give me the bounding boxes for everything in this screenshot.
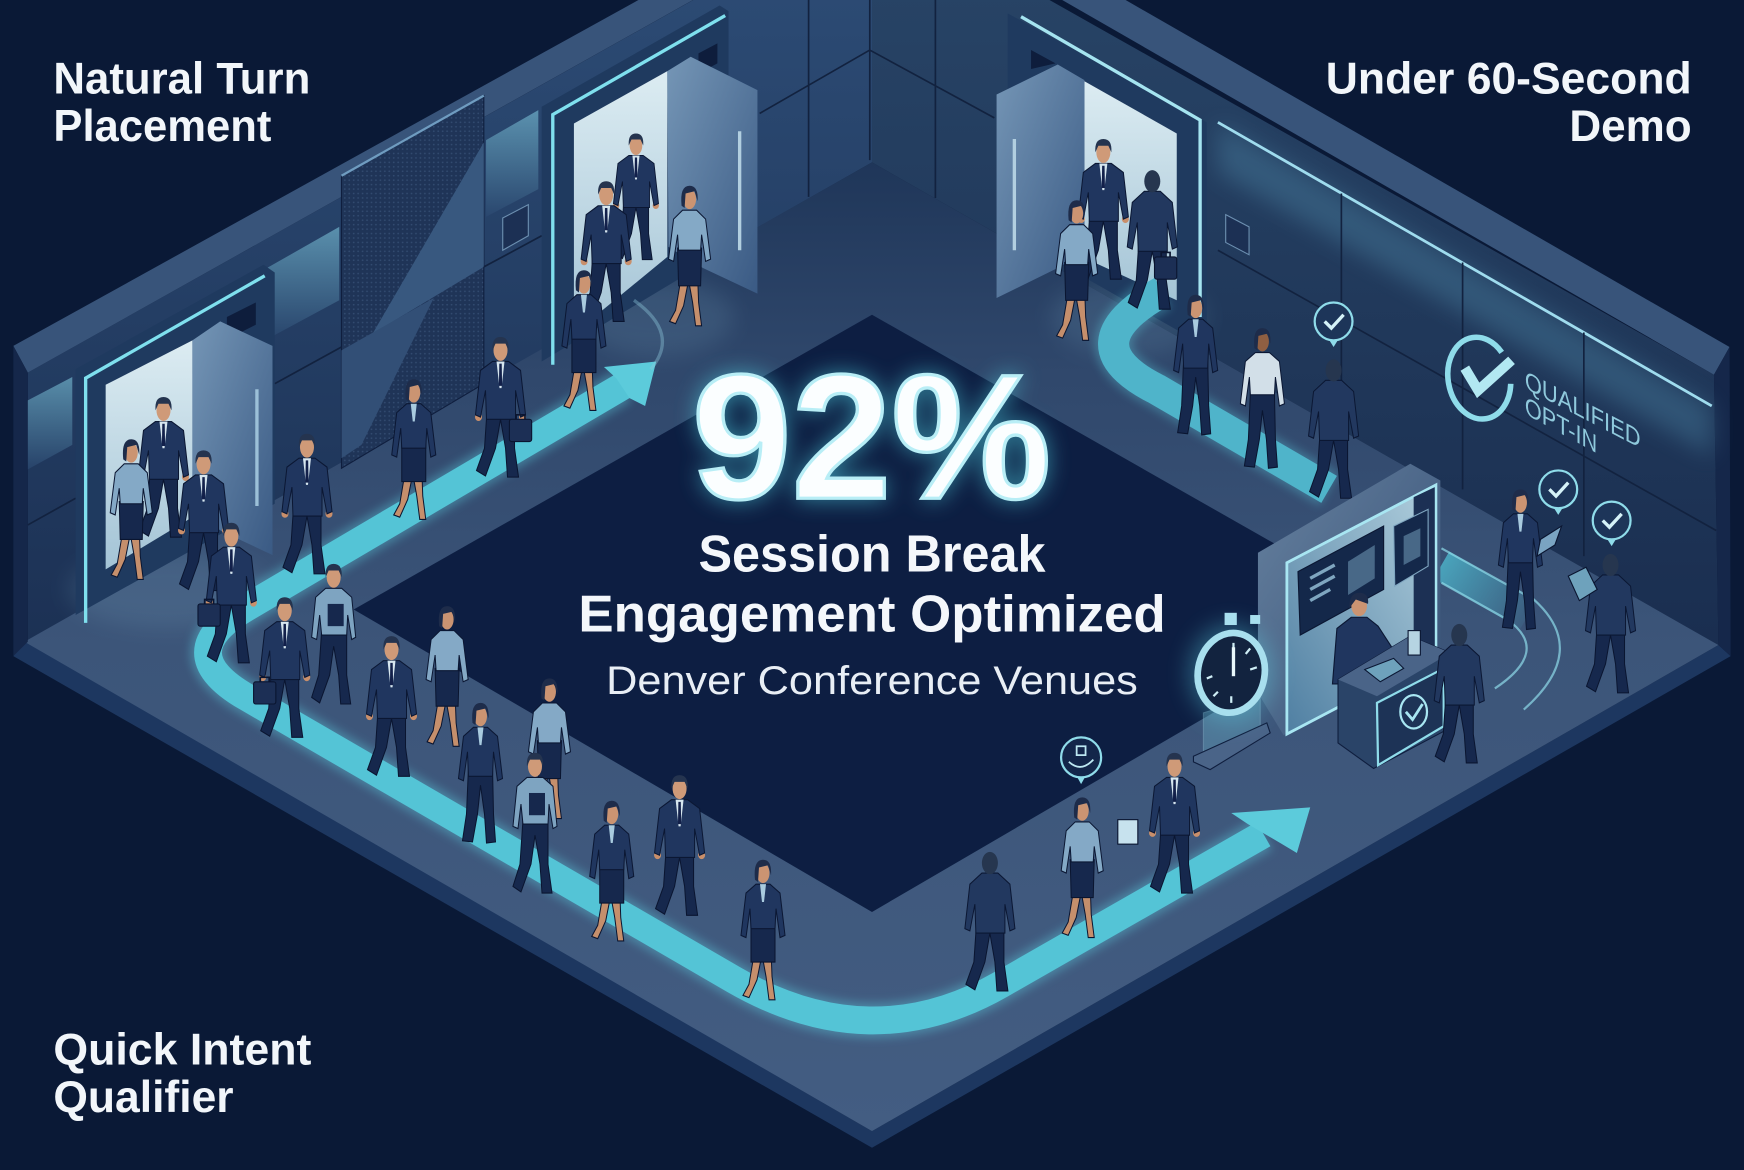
corner label: quick intent qualifier — [53, 1025, 312, 1122]
booth back wall — [1287, 485, 1436, 734]
right wall seams — [1218, 194, 1716, 556]
floor rim — [13, 639, 1731, 1148]
person: attendee with tablet — [1498, 489, 1562, 629]
wall plate right — [1226, 215, 1249, 255]
left door two — [542, 6, 757, 365]
side screen — [1394, 509, 1428, 586]
stand — [1203, 696, 1260, 756]
check ring icon — [1441, 332, 1517, 424]
far right path segment — [1441, 548, 1560, 710]
bubble three — [1593, 502, 1631, 546]
demo booth — [1258, 464, 1484, 769]
main guided path — [208, 361, 1310, 1020]
right door — [997, 13, 1207, 347]
path band — [208, 386, 1264, 1020]
left wall lit strips — [28, 377, 72, 469]
people at left door two — [392, 133, 711, 519]
qualified opt-in wall sign — [1441, 332, 1641, 459]
corner label: under 60-second demo: Under 60-Second — [1326, 54, 1692, 103]
screen items — [1310, 565, 1335, 601]
watch face — [1191, 628, 1271, 718]
right path segment — [1114, 291, 1329, 489]
corner label: quick intent qualifier: Quick Intent — [53, 1025, 312, 1074]
right wall cap — [1062, 0, 1730, 375]
stat glow: 92% — [692, 337, 1051, 536]
people on lower left arm — [254, 564, 785, 1000]
visitor at desk — [1434, 624, 1484, 763]
corner label: natural turn placement: Natural Turn — [53, 54, 310, 103]
corner label: under 60-second demo: Demo — [1569, 102, 1692, 151]
right wall lit line — [1218, 122, 1712, 406]
arrow head: lower — [1231, 807, 1310, 853]
bubble one — [1315, 303, 1352, 347]
people at right door — [1056, 139, 1359, 498]
path glow — [208, 386, 1264, 1020]
location line: Denver Conference Venues — [606, 659, 1138, 703]
dark right part — [1414, 487, 1435, 667]
corner label: under 60-second demo — [1326, 54, 1692, 151]
corner label: natural turn placement: Placement — [53, 102, 272, 151]
wall details — [28, 0, 1716, 556]
wall plate left — [503, 205, 528, 250]
left wall — [28, 0, 872, 642]
right wall — [872, 0, 1718, 645]
check bubbles — [1061, 303, 1631, 784]
watch hand — [1232, 647, 1235, 676]
right end face — [1714, 347, 1731, 656]
subtitle: Engagement Optimized — [578, 586, 1166, 644]
booth attendant — [1332, 593, 1393, 684]
people on lower right arm — [965, 753, 1200, 991]
corner label: quick intent qualifier: Qualifier — [53, 1073, 234, 1122]
arrow head: upper — [604, 361, 656, 406]
right wall lit glow — [1218, 122, 1712, 456]
people at left door one — [110, 397, 333, 663]
central void — [354, 315, 1390, 912]
sign label: QUALIFIED — [1525, 365, 1641, 454]
left wall seams — [28, 0, 994, 525]
watch crown — [1225, 613, 1260, 625]
main screen — [1298, 526, 1384, 635]
bubble two — [1539, 470, 1577, 515]
textured feature panel — [341, 96, 484, 468]
subtitle: Session Break — [698, 526, 1046, 584]
watch ticks — [1207, 643, 1257, 703]
person: visitor with tablet — [1568, 554, 1636, 693]
door light on floor — [67, 278, 1207, 628]
watch glow — [1189, 624, 1274, 722]
bubble: hand offer — [1061, 737, 1101, 784]
sign label: OPT-IN — [1525, 390, 1597, 459]
corner label: natural turn placement — [53, 54, 310, 151]
left door one — [76, 265, 275, 623]
booth body — [1258, 464, 1440, 735]
left wall cap — [13, 0, 693, 373]
desk — [1338, 631, 1450, 769]
stopwatch — [1189, 613, 1274, 770]
stat number: 92% — [692, 337, 1051, 536]
left end face — [13, 346, 28, 656]
subtitle — [578, 526, 1166, 644]
door two floor arc — [634, 300, 662, 369]
hero statistic — [692, 337, 1051, 536]
